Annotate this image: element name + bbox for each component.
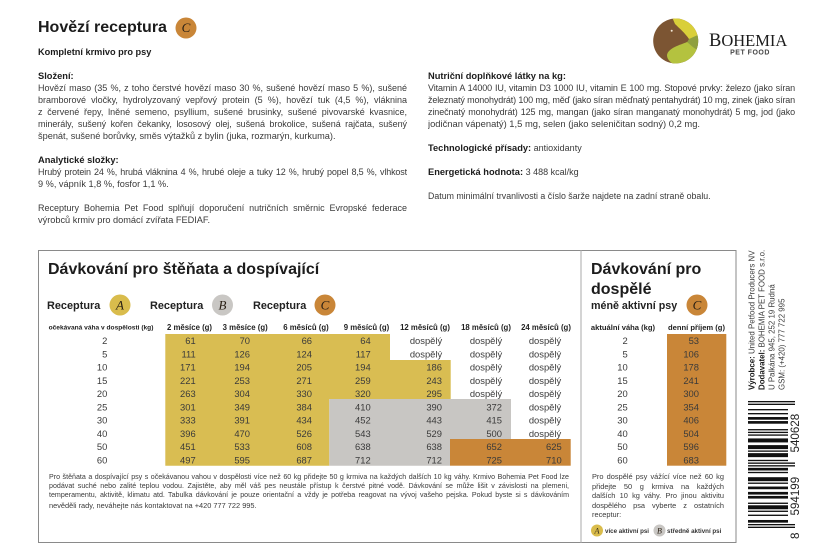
logo wordmark: BOHEMIA (709, 31, 787, 51)
row 10 kg: 194 (355, 362, 371, 372)
row 2 kg (102, 335, 561, 346)
barcode: 540628 (789, 414, 802, 452)
row 30 kg: dospělý (529, 415, 561, 426)
text block: composition (38, 71, 407, 141)
row 60 kg: 60 (97, 454, 107, 466)
table: adults dosage values: 60 (617, 454, 628, 466)
barcode (748, 401, 802, 539)
table header: puppies: 12 měsíců (g) (400, 323, 450, 332)
text block: nutritional additives (428, 71, 795, 129)
table: adults dosage values: 106 (683, 348, 699, 359)
text block: composition: z červené řepy, lněné semeno, psyllium, sušené brusinky, sušené pivovarské kvasnice, (38, 107, 407, 117)
footnote: adults: Pro dospělé psy vážící více než 60 kg (592, 472, 724, 481)
row 20 kg: dospělý (529, 388, 561, 399)
row 60 kg (97, 454, 562, 466)
row 25 kg: 25 (97, 401, 107, 412)
table: adults dosage values: 596 (683, 441, 699, 452)
text block: composition: špenát, sušené borůvky, směs výtažků z bylin (juka, rozmarýn, kurkuma). (38, 131, 336, 141)
row 25 kg: 384 (296, 401, 312, 412)
row 20 kg: 263 (180, 388, 196, 399)
row 50 kg: 638 (355, 441, 371, 452)
legend: activity levels: A (594, 526, 600, 536)
table: adults dosage values: 25 (617, 401, 628, 412)
row 15 kg: 271 (296, 375, 312, 386)
row 2 kg: 66 (302, 335, 312, 346)
panel: dosage frame (38, 250, 736, 543)
row 15 kg: 15 (97, 375, 107, 386)
table: adults dosage values: 178 (683, 362, 699, 372)
row 10 kg (97, 362, 561, 372)
text block: manufacturer info: Výrobce: United Petfood Producers NV (747, 250, 756, 390)
row 5 kg: 5 (102, 348, 107, 359)
legend: activity levels: středně aktivní psi (667, 528, 722, 535)
row 40 kg: 529 (426, 428, 442, 439)
row 5 kg: dospělý (410, 348, 442, 359)
row 10 kg: dospělý (470, 362, 502, 372)
text block: analytical components (38, 155, 407, 189)
row 15 kg (97, 375, 561, 386)
row 5 kg: 111 (181, 348, 196, 359)
table header: puppies: 6 měsíců (g) (283, 323, 329, 332)
row 30 kg: 434 (296, 415, 312, 426)
row 2 kg: dospělý (529, 335, 561, 346)
row 50 kg: 50 (97, 441, 107, 452)
row 50 kg: 608 (296, 441, 312, 452)
row 20 kg: 295 (426, 388, 442, 399)
table header: puppies: 24 měsíců (g) (521, 323, 571, 332)
row 20 kg: 304 (234, 388, 250, 399)
row 40 kg: 40 (97, 428, 107, 439)
chart: adult intake zone (667, 334, 726, 466)
row 2 kg: 2 (102, 335, 107, 346)
row 40 kg: 470 (234, 428, 250, 439)
row 10 kg: 186 (426, 362, 442, 372)
table header: puppies (49, 323, 571, 332)
row 20 kg: 330 (296, 388, 312, 399)
subtitle: Kompletní krmivo pro psy (38, 47, 151, 57)
table header: adults (591, 323, 725, 332)
legend: recipes A B C: C (321, 298, 330, 312)
row 60 kg: 712 (426, 454, 442, 466)
row 30 kg: 30 (97, 415, 107, 426)
table: adults dosage values: 5 (622, 348, 628, 359)
legend: activity levels: B (657, 526, 662, 536)
row 60 kg: 710 (546, 454, 562, 466)
row 5 kg: 126 (234, 348, 250, 359)
footnote: adults: receptur: (592, 510, 621, 519)
text block: manufacturer info: GSM: (+420) 777 722 995 (777, 298, 786, 390)
title: Hovězí receptura (38, 19, 167, 36)
text block: composition: Hovězí maso (35 %, z toho čerstvé hovězí maso 30 %, sušené hovězí maso 5 %), sušené (38, 83, 407, 93)
row 30 kg (97, 415, 561, 426)
row 2 kg: 61 (185, 335, 196, 346)
footnote: puppies (49, 472, 569, 510)
row 5 kg: 124 (296, 348, 312, 359)
barcode: 8 (789, 533, 802, 539)
text block: analytical components: Hrubý protein 24 %, hrubá vláknina 4 %, hrubé oleje a tuky 12 %, hrubý popel 8,5 %, vlhkost (38, 167, 407, 177)
table: adults dosage values: 354 (683, 401, 699, 412)
row 50 kg: 533 (234, 441, 250, 452)
text block: expiry note: Datum minimální trvanlivosti a číslo šarže najdete na zadní straně obalu. (428, 191, 711, 201)
row 25 kg: 410 (355, 401, 371, 412)
footnote: puppies: podávat suché nebo zalité teplou vodou. Zajistěte, aby měl váš pes neustále přístup k čerstvé pitné vodě. Dávkování se může lišit v závislosti na plemeni, (49, 482, 569, 490)
table header: puppies: 3 měsíce (g) (223, 323, 268, 332)
text block: composition: minerály, sušený kořen čekanky, lososový olej, sušená brokolice, sušená rajčata, sušený (38, 119, 407, 129)
table: adults dosage values: 683 (683, 454, 699, 466)
table header: adults: aktuální váha (kg) (591, 323, 656, 332)
footnote: puppies: temperamentu, aktivitě, klimatu atd. Tabulka dávkování je pouze orientační a vždy je potřeba reagovat na vývoj vašeho pejska. Pokud byste si s dávkováním (49, 491, 569, 499)
text block: nutritional additives: Nutriční doplňkové látky na kg: (428, 71, 566, 81)
footnote: adults (592, 472, 724, 519)
table: adults dosage values: 20 (617, 388, 628, 399)
icon: recipe C badge (title): C (182, 20, 191, 35)
legend: recipes A B C: Receptura (47, 300, 101, 312)
table: adults dosage values: 406 (683, 415, 699, 426)
logo wordmark: PET FOOD (730, 50, 770, 56)
row 40 kg (97, 428, 561, 439)
legend: recipes A B C: Receptura (253, 300, 307, 312)
table: adults dosage values: 300 (683, 388, 699, 399)
text block: FEDIAF note (38, 203, 407, 225)
row 60 kg: 497 (180, 454, 196, 466)
text block: manufacturer info: U Palkána 945, 252 19 Rudná (767, 284, 776, 390)
heading: adults dosage: Dávkování pro (591, 261, 701, 278)
table: adults dosage values: 15 (617, 375, 628, 386)
text block: analytical components: 9 %, vápník 1,8 %, fosfor 1,1 %. (38, 179, 169, 189)
table: adults dosage values: 241 (683, 375, 699, 386)
row 50 kg: 451 (180, 441, 196, 452)
logo: Bohemia Pet Food (653, 18, 698, 64)
text block: manufacturer info (747, 250, 786, 390)
footnote: adults: dospělého psa vyberte z ostatních (592, 501, 724, 510)
table: adults dosage values: 30 (617, 415, 628, 426)
row 60 kg: 687 (296, 454, 312, 466)
row 5 kg: 117 (356, 348, 371, 359)
table header: puppies: 9 měsíců (g) (344, 323, 390, 332)
table: adults dosage values: 53 (689, 335, 699, 346)
table header: puppies: 18 měsíců (g) (461, 323, 511, 332)
row 20 kg: dospělý (470, 388, 502, 399)
row 20 kg (97, 388, 561, 399)
table header: puppies: očekávaná váha v dospělosti (kg) (49, 324, 153, 331)
icon: recipe C badge (adults) (686, 294, 708, 316)
row 25 kg: 301 (180, 401, 196, 412)
row 30 kg: 391 (234, 415, 250, 426)
row 2 kg: dospělý (470, 335, 502, 346)
table: adults dosage values: 504 (683, 428, 699, 439)
row 25 kg (97, 401, 561, 412)
row 2 kg: 64 (360, 335, 371, 346)
table: puppies dosage values (97, 335, 562, 466)
text block: analytical components: Analytické složky: (38, 155, 119, 165)
row 30 kg: 333 (180, 415, 196, 426)
row 25 kg: 390 (426, 401, 442, 412)
heading: puppies dosage: Dávkování pro štěňata a dospívající (48, 261, 320, 278)
row 2 kg: dospělý (410, 335, 442, 346)
text block: nutritional additives: železnatý monohydrát) 100 mg, měď (jako síran měďnatý pentahydrát) 10 mg, zinek (jako síran (428, 95, 795, 105)
heading: adults dosage: dospělé (591, 281, 652, 298)
text block: nutritional additives: jodičnan vápenatý) 1,5 mg, selen (jako seleničitan sodný) 0,2 mg. (428, 118, 700, 129)
row 50 kg: 638 (426, 441, 442, 452)
row 30 kg: 443 (426, 415, 442, 426)
text block: nutritional additives: Vitamin A 14000 IU, vitamin D3 1000 IU, vitamin E 100 mg. Stopové prvky: železo (jako síran (428, 83, 795, 93)
text block: FEDIAF note: výrobců krmiv pro domácí zvířata FEDIAF. (38, 215, 210, 225)
row 60 kg: 712 (355, 454, 371, 466)
icon: recipe C badge (adults): C (693, 298, 702, 312)
row 60 kg: 595 (234, 454, 250, 466)
row 10 kg: 171 (180, 362, 196, 372)
text block: composition: bramborové vločky, hydrolyzovaný vepřový protein (5 %), hovězí tuk (4,5 %), vláknina (38, 95, 407, 105)
footnote: puppies: nevěděli rady, neváhejte nás kontaktovat na +420 777 722 995. (49, 501, 257, 510)
heading: adults dosage (591, 261, 701, 298)
text block: technological additives: Technologické přísady: antioxidanty (428, 143, 582, 153)
row 50 kg: 652 (486, 441, 502, 452)
text block: energy value: Energetická hodnota: 3 488 kcal/kg (428, 167, 579, 177)
row 15 kg: dospělý (470, 375, 502, 386)
footnote: adults: dalších 10 kg váhy. Pro jinou aktivitu (592, 491, 724, 500)
row 15 kg: 221 (180, 375, 196, 386)
legend: activity levels: více aktivní psi (605, 528, 649, 535)
icon: recipe C badge (title) (176, 18, 196, 38)
legend: recipes A B C: A (115, 298, 124, 312)
row 50 kg: 625 (546, 441, 562, 452)
text block: composition: Složení: (38, 71, 74, 81)
row 10 kg: dospělý (529, 362, 561, 372)
row 25 kg: 349 (234, 401, 250, 412)
row 30 kg: 415 (486, 415, 502, 426)
footnote: adults: přidejte 50 g krmiva na každých (592, 482, 724, 491)
row 25 kg: 372 (486, 401, 502, 412)
row 15 kg: 253 (234, 375, 250, 386)
row 30 kg: 452 (355, 415, 371, 426)
row 40 kg: 543 (355, 428, 371, 439)
row 10 kg: 205 (296, 362, 312, 372)
row 15 kg: 259 (355, 375, 371, 386)
text block: FEDIAF note: Receptury Bohemia Pet Food splňují doporučení nutričních směrnic Evropské federace (38, 203, 407, 213)
row 20 kg: 20 (97, 388, 107, 399)
row 50 kg (97, 441, 562, 452)
legend: recipes A B C: Receptura (150, 300, 204, 312)
subheading: less active dogs: méně aktivní psy (591, 300, 677, 312)
table: adults dosage values: 40 (617, 428, 628, 439)
table: adults dosage values (617, 335, 699, 466)
text block: manufacturer info: Dodavatel: BOHEMIA PET FOOD s.r.o. (757, 250, 766, 390)
row 5 kg (102, 348, 561, 359)
row 10 kg: 10 (97, 362, 107, 372)
table: adults dosage values: 50 (617, 441, 628, 452)
row 40 kg: 396 (180, 428, 196, 439)
row 25 kg: dospělý (529, 401, 561, 412)
barcode: 594199 (789, 477, 802, 516)
chart: recipe colour zones (165, 334, 571, 466)
table header: puppies: 2 měsíce (g) (167, 323, 212, 332)
text block: nutritional additives: zinečnatý monohydrát) 125 mg, mangan (jako síran manganatý monohydrát) 5 mg, jod (jako (428, 107, 795, 117)
table: adults dosage values: 10 (617, 362, 628, 372)
row 2 kg: 70 (240, 335, 250, 346)
row 5 kg: dospělý (529, 348, 561, 359)
row 20 kg: 320 (355, 388, 371, 399)
row 5 kg: dospělý (470, 348, 502, 359)
row 40 kg: dospělý (529, 428, 561, 439)
row 40 kg: 526 (296, 428, 312, 439)
footnote: puppies: Pro štěňata a dospívající psy s očekávanou vahou v dospělosti více než 60 kg přidejte 50 g krmiva na každých dalších 10 kg váhy. Krmivo Bohemia Pet Food lze (49, 472, 569, 480)
row 15 kg: 243 (426, 375, 442, 386)
row 10 kg: 194 (234, 362, 250, 372)
row 15 kg: dospělý (529, 375, 561, 386)
legend: activity levels (591, 524, 722, 536)
row 60 kg: 725 (486, 454, 502, 466)
table: adults dosage values: 2 (622, 335, 628, 346)
legend: recipes A B C: B (219, 298, 227, 312)
row 40 kg: 500 (486, 428, 502, 439)
table header: adults: denní příjem (g) (668, 323, 725, 332)
legend: recipes A B C (47, 294, 336, 316)
